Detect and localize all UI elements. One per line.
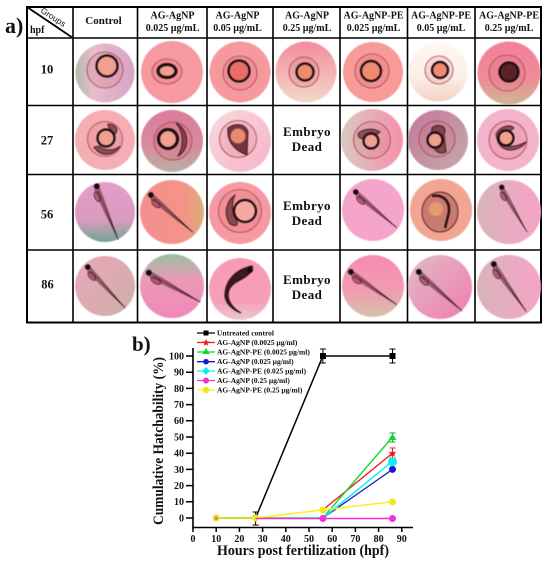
x axis tick labels <box>190 534 407 545</box>
y axis tick labels: 20 <box>174 481 184 492</box>
column headers: 0.05 µg/mL <box>417 23 466 34</box>
embryo dead labels: Dead <box>292 213 323 228</box>
row headers: hpf: 27 <box>41 134 53 148</box>
embryo dead labels: Embryo <box>283 124 331 139</box>
series: AG-AgNP 0.025 <box>323 466 396 518</box>
y axis tick labels: 100 <box>169 352 184 362</box>
legend: AG-AgNP-PE (0.0025 µg/ml) <box>217 348 310 356</box>
column headers: 0.025 µg/mL <box>146 23 200 34</box>
y axis tick labels: 10 <box>174 497 184 508</box>
row headers: hpf: 10 <box>41 62 53 76</box>
series: AG-AgNP-PE 0.25 <box>213 498 396 522</box>
panel label: b): b) <box>132 332 151 356</box>
column headers: Control <box>85 15 122 27</box>
x axis tick labels: 50 <box>304 534 314 545</box>
y axis title: Cumulative Hatchability (%) <box>151 357 167 525</box>
y axis tick labels: 50 <box>174 432 184 444</box>
x axis tick labels: 30 <box>258 534 268 545</box>
header corner: groups and hpf: hpf <box>30 25 45 36</box>
legend: AG-AgNP-PE (0.025 µg/ml) <box>217 366 307 376</box>
column headers: AG-AgNP-PE <box>479 10 539 22</box>
header corner: groups and hpf: Groups <box>39 5 68 29</box>
x axis tick labels: 70 <box>350 534 360 545</box>
y axis tick labels: 80 <box>174 384 184 395</box>
y axis tick labels: 0 <box>179 514 184 524</box>
column headers: 0.05 µg/mL <box>213 23 262 34</box>
column headers: 0.25 µg/mL <box>485 23 534 34</box>
y axis tick labels: 70 <box>174 400 184 411</box>
embryo dead labels: Embryo <box>283 272 331 287</box>
series: untreated control <box>216 349 396 525</box>
x axis tick labels: 90 <box>397 534 407 545</box>
x axis tick labels: 80 <box>374 534 384 545</box>
header corner: groups and hpf <box>27 5 73 38</box>
table grid <box>27 6 541 323</box>
series: AG-AgNP 0.25 <box>215 515 396 522</box>
row headers: hpf: 56 <box>41 208 53 222</box>
column headers: AG-AgNP <box>216 10 259 22</box>
x axis tick labels: 60 <box>327 534 337 545</box>
column headers: AG-AgNP <box>285 10 329 22</box>
column headers: 0.25 µg/mL <box>283 23 332 34</box>
column headers <box>85 10 539 34</box>
y axis tick labels: 30 <box>174 465 184 476</box>
legend: AG-AgNP (0.0025 µg/ml) <box>217 338 298 347</box>
axes and ticks <box>186 348 413 532</box>
embryo dead labels: Embryo <box>283 198 331 213</box>
row headers: hpf <box>41 62 54 292</box>
x axis tick labels: 20 <box>234 534 244 545</box>
x axis tick labels: 40 <box>281 534 291 545</box>
column headers: AG-AgNP-PE <box>411 10 471 22</box>
row 27 hpf embryos <box>75 109 539 172</box>
panel: hatchability line chart <box>151 328 413 559</box>
row headers: hpf: 86 <box>41 278 54 292</box>
legend: AG-AgNP (0.025 µg/ml) <box>217 357 294 366</box>
series: AG-AgNP-PE 0.0025 <box>216 433 396 518</box>
legend <box>197 328 310 394</box>
embryo dead labels <box>283 124 331 302</box>
legend: Untreated control <box>217 328 274 338</box>
series: AG-AgNP 0.0025 <box>323 448 396 510</box>
y axis tick labels: 40 <box>174 448 184 460</box>
y axis tick labels: 60 <box>174 416 184 427</box>
y axis tick labels <box>169 352 184 524</box>
row 86 hpf larvae <box>75 254 541 320</box>
embryo dead labels: Dead <box>292 139 323 154</box>
column headers: AG-AgNP <box>151 10 194 22</box>
x axis title: Hours post fertilization (hpf) <box>217 543 389 559</box>
panel label: a): a) <box>5 13 23 38</box>
embryo dead labels: Dead <box>292 287 323 302</box>
x axis tick labels: 10 <box>211 534 221 545</box>
row 10 hpf embryos <box>76 41 540 104</box>
panel: embryo image table <box>27 5 541 323</box>
row 56 hpf larvae and embryos <box>75 179 541 244</box>
legend: AG-AgNP-PE (0.25 µg/ml) <box>217 386 303 394</box>
series: AG-AgNP-PE 0.025 <box>323 457 397 518</box>
column headers: AG-AgNP-PE <box>344 10 404 22</box>
y axis tick labels: 90 <box>174 368 184 378</box>
column headers: 0.025 µg/mL <box>347 23 401 34</box>
legend: AG-AgNP (0.25 µg/ml) <box>217 376 290 385</box>
x axis tick labels: 0 <box>190 534 196 545</box>
